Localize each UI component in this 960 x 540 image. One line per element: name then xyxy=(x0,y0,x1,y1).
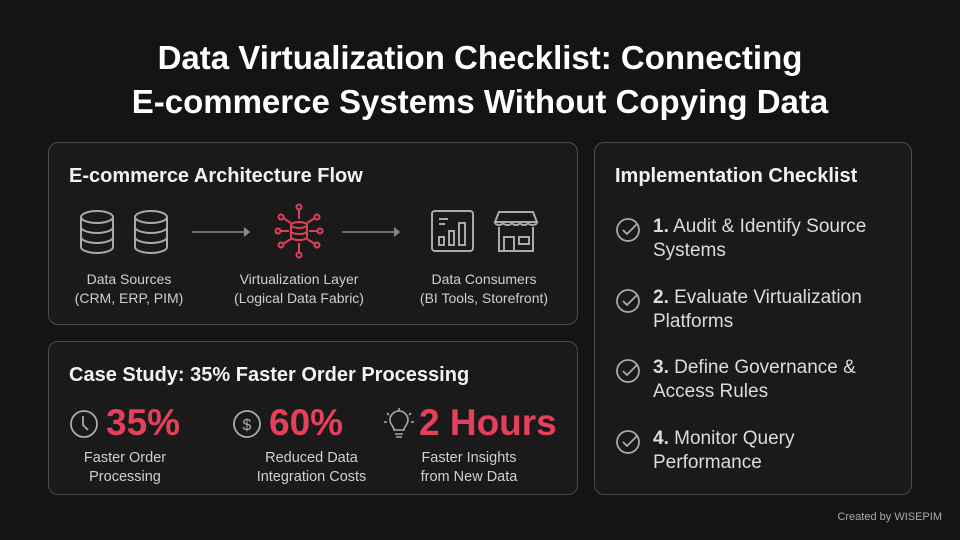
title: E-commerce Systems Without Copying Data xyxy=(132,83,828,120)
label: virtualization layer: (Logical Data Fabric) xyxy=(234,290,364,306)
title xyxy=(132,39,828,120)
arrow 2 xyxy=(342,228,400,236)
checklist item 2 xyxy=(616,287,862,332)
panel: architecture flow xyxy=(48,142,578,325)
heading: Implementation Checklist xyxy=(615,165,857,187)
stat 2: Reduced Data xyxy=(265,450,358,466)
stat 2: 60% xyxy=(269,402,343,443)
icon: lightbulb xyxy=(384,408,414,438)
stat 2: Integration Costs xyxy=(257,469,366,485)
stat 3: from New Data xyxy=(421,469,517,485)
checklist item 1: Systems xyxy=(653,240,726,261)
stat 1: Processing xyxy=(89,469,161,485)
icon: clock xyxy=(70,410,98,438)
label: virtualization layer: Virtualization Layer xyxy=(240,271,358,287)
stat 2 xyxy=(233,402,366,485)
stat 1: Faster Order xyxy=(84,450,166,466)
stat 1: 35% xyxy=(106,402,180,443)
checklist item 3: 3. Define Governance & xyxy=(653,357,856,378)
label: data sources: Data Sources xyxy=(87,271,171,287)
arrow 1 xyxy=(192,228,250,236)
title: Data Virtualization Checklist: Connecting xyxy=(158,39,802,76)
checklist item 4 xyxy=(616,428,795,473)
panel: implementation checklist xyxy=(594,142,912,495)
icon: databases xyxy=(80,210,168,254)
heading: E-commerce Architecture Flow xyxy=(69,165,363,187)
label: data sources xyxy=(75,271,183,306)
checklist item 3: Access Rules xyxy=(653,381,768,402)
icon: dashboard and storefront xyxy=(431,210,538,252)
checklist item 1: 1. Audit & Identify Source xyxy=(653,216,866,237)
checklist item 2: 2. Evaluate Virtualization xyxy=(653,287,862,308)
label: data consumers: (BI Tools, Storefront) xyxy=(420,290,548,306)
checklist item 1 xyxy=(616,216,866,261)
stat 3 xyxy=(384,402,557,485)
label: virtualization layer xyxy=(234,271,364,306)
icon: dollar xyxy=(233,410,261,438)
panel: case study xyxy=(48,341,578,495)
credit: Created by WISEPIM xyxy=(837,511,942,523)
checklist item 3 xyxy=(616,357,856,402)
icon: virtualization layer xyxy=(274,204,324,258)
icon: dollar: $ xyxy=(243,417,252,434)
label: data consumers xyxy=(420,271,548,306)
heading: Case Study: 35% Faster Order Processing xyxy=(69,364,469,386)
label: data consumers: Data Consumers xyxy=(431,271,537,287)
stat 3: 2 Hours xyxy=(419,402,557,443)
checklist item 4: 4. Monitor Query xyxy=(653,428,795,449)
checklist item 2: Platforms xyxy=(653,311,733,332)
stat 1 xyxy=(70,402,180,485)
checklist item 4: Performance xyxy=(653,452,762,473)
stat 3: Faster Insights xyxy=(421,450,517,466)
label: data sources: (CRM, ERP, PIM) xyxy=(75,290,183,306)
